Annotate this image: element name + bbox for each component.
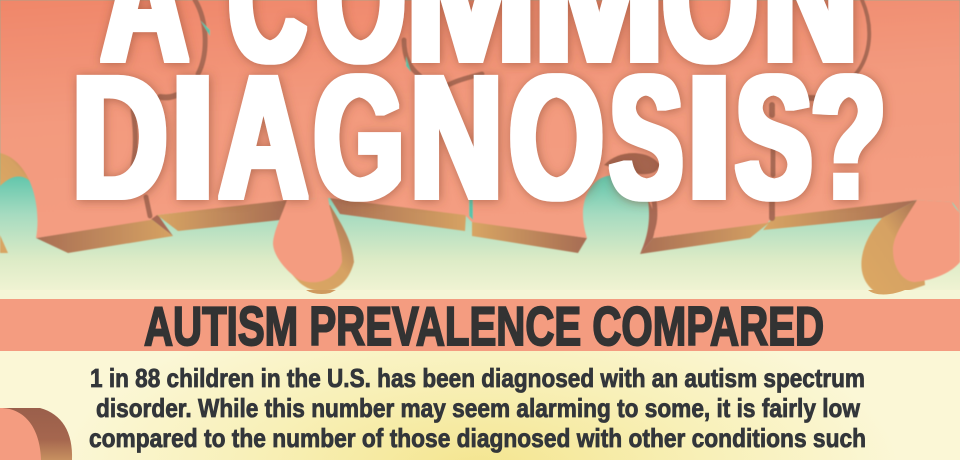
puzzle teal glints	[200, 20, 473, 220]
puzzle side faces	[0, 153, 925, 295]
title line 2: I	[169, 39, 216, 236]
lower-left puzzle tab	[0, 408, 72, 460]
intro paragraph: disorder. While this number may seem alarming to some, it is fairly low	[96, 393, 861, 423]
centre drop overlap	[306, 290, 336, 294]
puzzle tab: centre drop	[273, 198, 342, 282]
intro paragraph: compared to the number of those diagnosed with other conditions such	[89, 423, 866, 453]
title line 2: S	[610, 40, 683, 236]
title line 2: G	[314, 39, 404, 236]
title line 2: ?	[811, 39, 886, 236]
puzzle face	[0, 0, 960, 238]
intro paragraph	[89, 363, 866, 460]
title line 2: D	[72, 40, 168, 236]
title line 2: O	[509, 40, 604, 236]
title line 2: A	[219, 39, 308, 236]
intro paragraph: 1 in 88 children in the U.S. has been diagnosed with an autism spectrum	[90, 363, 865, 393]
section heading band	[0, 295, 960, 357]
puzzle shaded tab	[604, 153, 660, 174]
background gradient	[0, 0, 960, 298]
puzzle tab: right drop	[893, 200, 960, 282]
title line 2	[72, 38, 886, 236]
title line 2: N	[410, 39, 503, 236]
title line 2: I	[685, 40, 734, 236]
title	[72, 0, 886, 236]
title line 1	[101, 0, 858, 99]
body panel background	[0, 351, 960, 460]
puzzle joint lines	[133, 0, 869, 236]
title line 2: S	[735, 38, 812, 236]
puzzle pieces illustration	[0, 0, 960, 295]
cream gap	[0, 290, 960, 299]
right tab overlap	[868, 290, 905, 294]
